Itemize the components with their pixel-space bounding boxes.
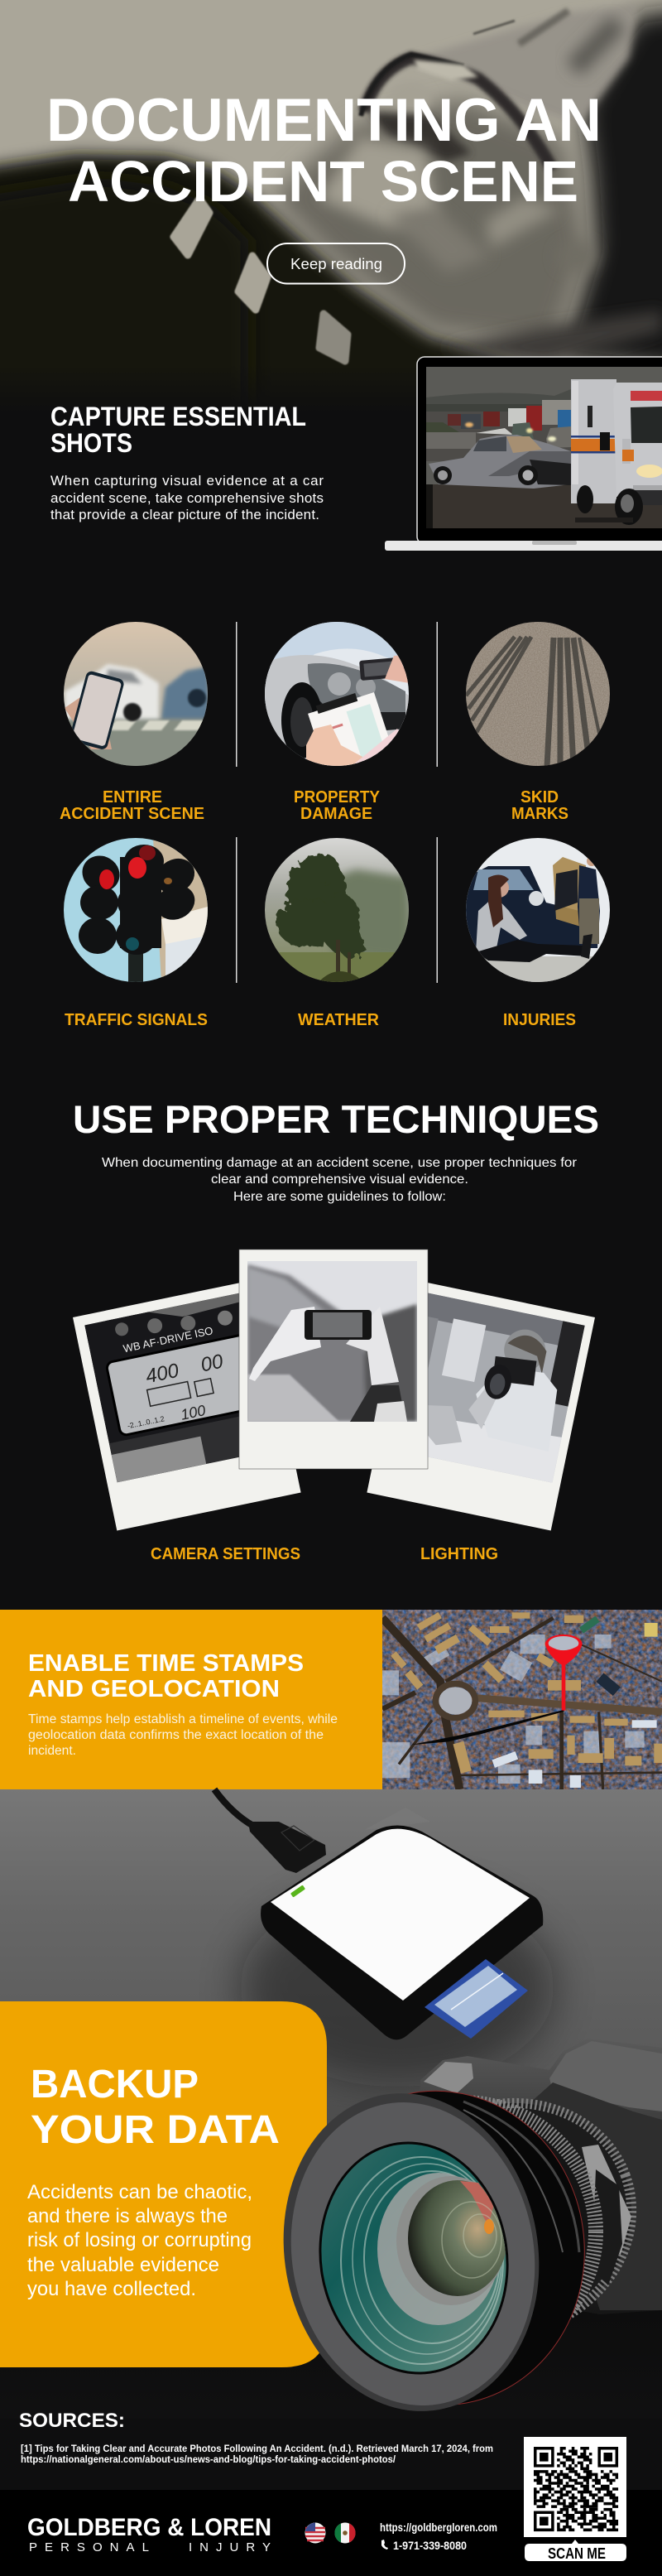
title: DOCUMENTING AN: [46, 87, 602, 154]
card reader with USB cable: [214, 1789, 543, 2039]
aerial map with red pin: [382, 1610, 662, 1789]
label: injuries: INJURIES: [503, 1011, 576, 1029]
camera keys: [174, 199, 348, 361]
circle photo: injuries: [466, 838, 610, 983]
label: entire accident scene: ACCIDENT SCENE: [60, 805, 204, 823]
sources text: https://nationalgeneral.com/about-us/news-and-blog/tips-for-taking-accident-photos/: [21, 2455, 396, 2465]
heading: capture essential shots: CAPTURE ESSENTIAL: [50, 402, 306, 431]
heading: capture essential shots: SHOTS: [50, 428, 132, 458]
panel: enable time stamps: [0, 1610, 382, 1789]
heading: enable time stamps: ENABLE TIME STAMPS: [28, 1650, 304, 1677]
text: techniques intro: clear and comprehensive visual evidence.: [211, 1172, 468, 1187]
text: time stamps: geolocation data confirms the exact location of the: [28, 1728, 324, 1742]
label: property damage: DAMAGE: [300, 805, 372, 823]
divider lines: row 2: [236, 837, 438, 983]
heading: backup your data: YOUR DATA: [31, 2108, 280, 2152]
circle photo: weather: [265, 838, 409, 985]
heading: backup your data: [31, 2063, 280, 2152]
glass: [304, 2130, 524, 2386]
title: ACCIDENT SCENE: [68, 149, 578, 214]
heading: backup your data: BACKUP: [31, 2063, 199, 2107]
polaroid: camera settings: 400: [144, 1360, 181, 1388]
polaroid: camera settings: [73, 1279, 302, 1531]
keep reading button: [267, 243, 405, 283]
polaroid: camera settings: 00: [199, 1351, 226, 1376]
polaroid: lighting: [367, 1279, 595, 1531]
keep reading button: Keep reading: [290, 256, 382, 272]
label: entire accident scene: [60, 788, 204, 823]
text: backup your data: you have collected.: [27, 2278, 196, 2300]
title: [46, 87, 602, 214]
contact: website and phone: [380, 2521, 497, 2552]
text: capture essential shots: accident scene, take comprehensive shots: [50, 490, 324, 506]
contact: website and phone: https://goldbergloren.com: [380, 2521, 497, 2534]
logo: Goldberg & Loren: [27, 2514, 271, 2554]
blurred light bands: [319, 137, 437, 228]
text: backup your data: Accidents can be chaotic,: [27, 2181, 252, 2203]
scan me tag: SCAN ME: [548, 2545, 606, 2562]
text: backup your data: [27, 2181, 252, 2300]
camera with lens: [259, 2039, 662, 2432]
text: time stamps: Time stamps help establish a timeline of events, while: [28, 1712, 338, 1726]
logo: Goldberg & Loren: GOLDBERG & LOREN: [27, 2514, 271, 2541]
logo: Goldberg & Loren: PERSONAL INJURY: [29, 2540, 271, 2554]
text: techniques intro: [102, 1156, 578, 1204]
text: techniques intro: Here are some guidelines to follow:: [233, 1190, 446, 1204]
hero background: blurred camera: [0, 0, 662, 378]
icon: US flag: [305, 2522, 326, 2544]
text: time stamps: incident.: [28, 1744, 76, 1758]
circle photo: entire accident scene: [64, 622, 209, 768]
circle photo: property damage: [265, 622, 409, 766]
rear ribbed ring: [345, 2068, 662, 2371]
label: property damage: [294, 788, 381, 823]
camera body: [420, 2039, 662, 2314]
sources text: [21, 2444, 493, 2465]
circle photo: traffic signals: [64, 838, 208, 985]
label: traffic signals: TRAFFIC SIGNALS: [65, 1011, 208, 1029]
text: capture essential shots: [50, 473, 324, 522]
sources heading: SOURCES:: [19, 2410, 125, 2432]
label: lighting: LIGHTING: [420, 1545, 498, 1563]
panel: backup background: [0, 1789, 662, 2125]
text: backup your data: and there is always the: [27, 2205, 228, 2227]
label: entire accident scene: ENTIRE: [103, 788, 162, 807]
polaroid: camera settings: -2..1..0..1.2: [127, 1414, 166, 1430]
label: property damage: PROPERTY: [294, 788, 381, 807]
text: backup your data: the valuable evidence: [27, 2254, 219, 2276]
blurred streaks: [519, 11, 568, 44]
text: techniques intro: When documenting damage at an accident scene, use proper techniques for: [102, 1156, 578, 1170]
circle photo: skid marks: [466, 622, 610, 767]
label: camera settings: CAMERA SETTINGS: [151, 1545, 300, 1563]
heading: capture essential shots: [50, 402, 306, 458]
black barrel: [272, 2072, 605, 2424]
laptop with accident photo: [385, 357, 662, 551]
contact: website and phone: 1-971-339-8080: [393, 2539, 467, 2552]
label: skid marks: SKID: [520, 788, 559, 807]
footer band: [0, 2490, 662, 2576]
polaroid: camera settings: 100: [180, 1402, 207, 1423]
label: skid marks: [511, 788, 568, 823]
panel: backup your data: [0, 2001, 327, 2367]
dark viewfinder ring: [364, 58, 553, 170]
QR code: [524, 2437, 626, 2537]
heading: enable time stamps: [28, 1650, 304, 1702]
heading: use proper techniques: USE PROPER TECHNIQUES: [73, 1097, 599, 1141]
icon: Mexico flag: [334, 2522, 356, 2544]
front ring: [259, 2073, 564, 2432]
polaroid: camera settings: WB AF·DRIVE ISO: [122, 1324, 214, 1355]
text: time stamps: [28, 1712, 338, 1758]
icon: phone: [381, 2540, 388, 2550]
text: backup your data: risk of losing or corrupting: [27, 2229, 252, 2251]
divider lines: row 1: [236, 622, 438, 767]
scan me tag: [525, 2540, 626, 2562]
text: capture essential shots: When capturing visual evidence at a car: [50, 473, 324, 489]
polaroid: center photo: [239, 1249, 428, 1469]
label: weather: WEATHER: [298, 1011, 380, 1029]
text: capture essential shots: that provide a clear picture of the incident.: [50, 507, 319, 522]
sources text: [1] Tips for Taking Clear and Accurate Photos Following An Accident. (n.d.). Retrieved March 17, 2024, from: [21, 2444, 493, 2454]
heading: enable time stamps: AND GEOLOCATION: [28, 1676, 280, 1702]
front ribbed ring: [331, 2102, 596, 2361]
label: skid marks: MARKS: [511, 805, 568, 823]
